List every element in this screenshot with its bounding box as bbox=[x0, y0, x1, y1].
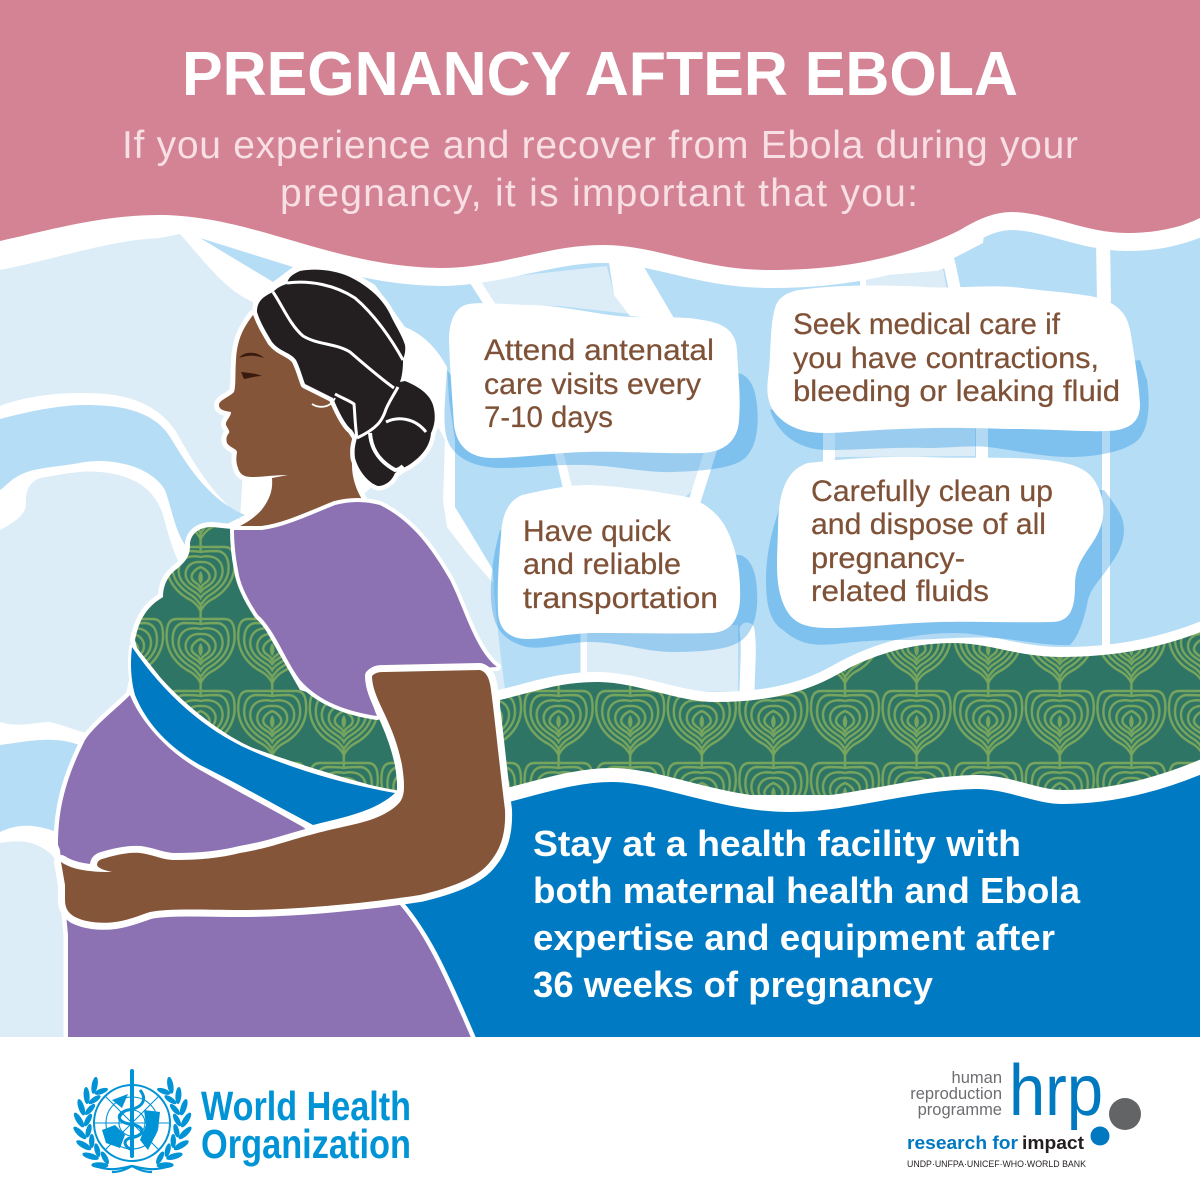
HRP logo bbox=[907, 1051, 1141, 1169]
ear line bbox=[312, 398, 335, 407]
HRP logo: reproduction bbox=[910, 1085, 1002, 1103]
HRP logo: human bbox=[952, 1069, 1002, 1087]
blue sash bbox=[131, 647, 395, 825]
callout: clean up fluids bbox=[766, 457, 1124, 645]
callout: seek medical care: bleeding or leaking fluid bbox=[793, 375, 1120, 408]
illustration: pregnant woman bbox=[58, 270, 505, 1040]
callout: clean up fluids: pregnancy- bbox=[811, 542, 965, 575]
callout: attend antenatal care: 7-10 days bbox=[484, 401, 613, 434]
dress sleeve bbox=[234, 502, 497, 716]
blue panel bbox=[380, 763, 1200, 1045]
callout: quick transportation bbox=[491, 485, 757, 652]
title: PREGNANCY AFTER EBOLA bbox=[182, 40, 1018, 109]
WHO logo bbox=[71, 1071, 411, 1176]
patterned green band bbox=[495, 623, 1200, 800]
green sling bbox=[135, 527, 405, 792]
footer bbox=[0, 1037, 1200, 1200]
WHO emblem bbox=[71, 1071, 194, 1176]
WHO wordmark bbox=[201, 1083, 411, 1167]
WHO wordmark: World Health bbox=[201, 1083, 411, 1129]
callout: clean up fluids: Carefully clean up bbox=[811, 475, 1053, 508]
map background bbox=[0, 215, 1200, 1037]
header band bbox=[0, 0, 1200, 270]
belly and dress bbox=[58, 695, 472, 1040]
WHO wordmark: Organization bbox=[201, 1121, 411, 1167]
callout: quick transportation: and reliable bbox=[523, 548, 681, 581]
callout: quick transportation: transportation bbox=[523, 582, 718, 615]
subtitle bbox=[122, 124, 1078, 215]
HRP logo: hrp bbox=[1009, 1051, 1103, 1131]
callout: clean up fluids: related fluids bbox=[811, 575, 989, 608]
eyebrow and eye bbox=[239, 353, 264, 379]
blue panel text: both maternal health and Ebola bbox=[533, 870, 1081, 911]
callout: attend antenatal care bbox=[444, 303, 758, 472]
blue panel text bbox=[533, 823, 1081, 1005]
callout: attend antenatal care: care visits every bbox=[484, 368, 701, 401]
subtitle: If you experience and recover from Ebola during your bbox=[122, 124, 1078, 167]
callout: seek medical care: you have contractions, bbox=[793, 342, 1099, 375]
HRP logo: research for bbox=[907, 1133, 1018, 1153]
blue panel text: 36 weeks of pregnancy bbox=[533, 964, 933, 1005]
head and neck bbox=[219, 315, 364, 530]
callout: seek medical care bbox=[767, 285, 1149, 457]
blue panel text: Stay at a health facility with bbox=[533, 823, 1021, 864]
HRP logo: programme bbox=[918, 1101, 1002, 1119]
hair bbox=[257, 270, 435, 486]
HRP logo: UNDP·UNFPA·UNICEF·WHO·WORLD BANK bbox=[907, 1159, 1086, 1169]
callout: attend antenatal care: Attend antenatal bbox=[484, 334, 714, 367]
HRP logo: impact bbox=[1022, 1133, 1084, 1153]
callout: clean up fluids: and dispose of all bbox=[811, 508, 1046, 541]
callout: seek medical care: Seek medical care if bbox=[793, 308, 1061, 341]
callout: quick transportation: Have quick bbox=[523, 515, 671, 548]
blue panel text: expertise and equipment after bbox=[533, 917, 1055, 958]
subtitle: pregnancy, it is important that you: bbox=[280, 172, 918, 215]
arm and hand bbox=[61, 670, 505, 923]
